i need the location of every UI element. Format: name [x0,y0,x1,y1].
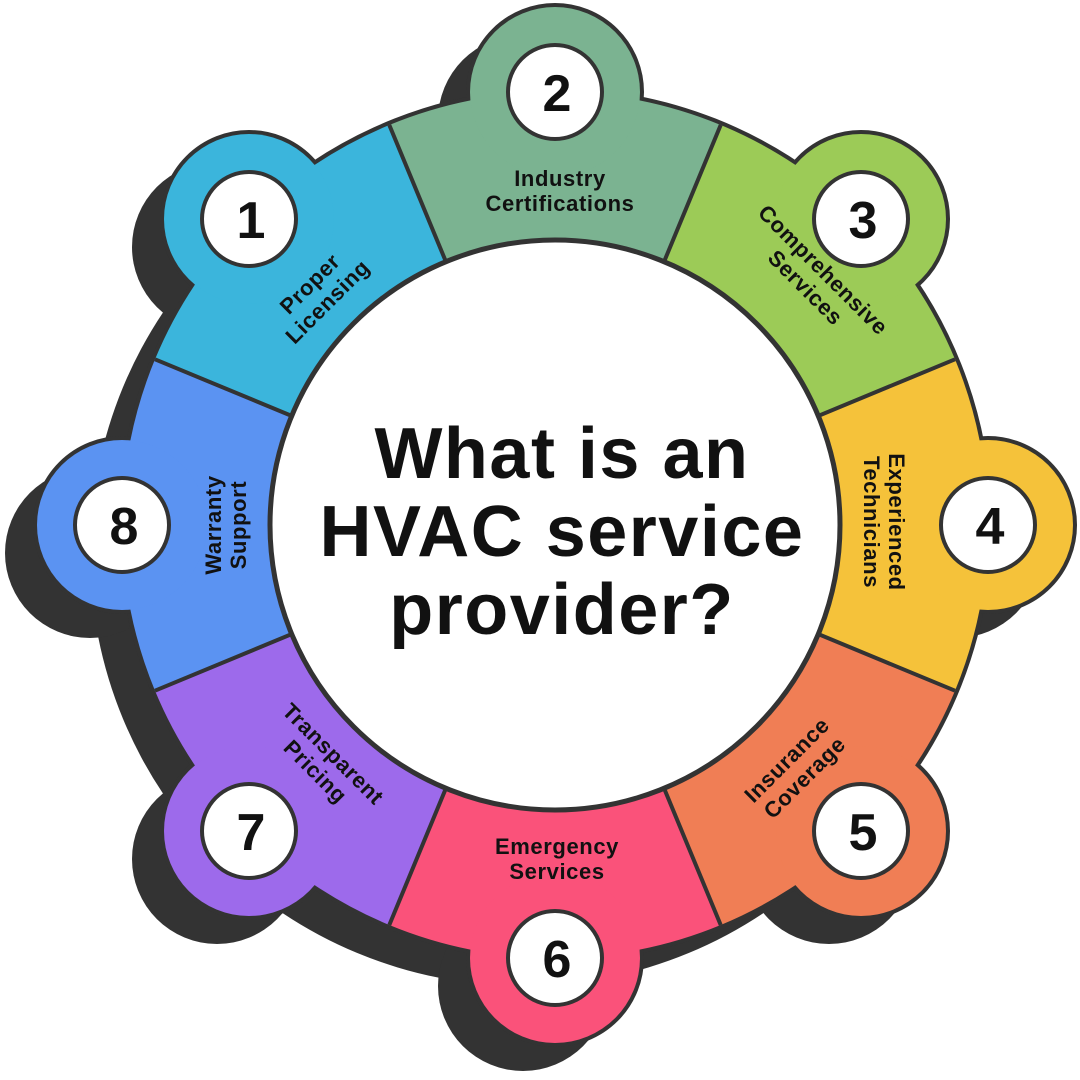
title: HVAC service [320,492,804,572]
segment 4 [555,359,1073,691]
labels [201,166,909,884]
numbers [110,65,1005,989]
segment 5 [555,525,955,925]
numbers: 8 [110,498,138,556]
segment 3 [555,125,955,525]
label 4: Experienced [884,453,909,591]
label 3: Comprehensive [753,200,893,340]
numbers: 4 [976,498,1005,556]
label 2: Certifications [486,191,634,216]
segment 6 [389,525,721,1043]
numbers: 2 [543,65,571,123]
label 1: Proper [275,249,345,319]
label 4: Technicians [859,456,884,588]
label 1: Licensing [280,254,375,349]
label 5: Insurance [739,712,834,807]
title [320,414,804,650]
segment 2 [389,7,721,525]
numbers: 7 [237,804,265,862]
label 8: Support [226,481,251,569]
numbers: 3 [849,192,877,250]
label 8: Warranty [201,475,226,575]
segment 1 [155,125,555,525]
segment 8 [37,359,555,691]
segment 7 [155,525,555,925]
label 7: Transparent [277,698,389,810]
title: provider? [389,570,735,650]
label 7: Pricing [279,735,352,808]
label 6: Services [509,859,605,884]
center circle [270,240,840,810]
number badges [75,45,1035,1005]
label 5: Coverage [759,732,851,824]
numbers: 1 [237,192,265,250]
title: What is an [374,414,750,494]
numbers: 6 [543,931,571,989]
label 6: Emergency [495,834,619,859]
label 3: Services [763,245,848,330]
label 2: Industry [514,166,606,191]
numbers: 5 [849,804,877,862]
